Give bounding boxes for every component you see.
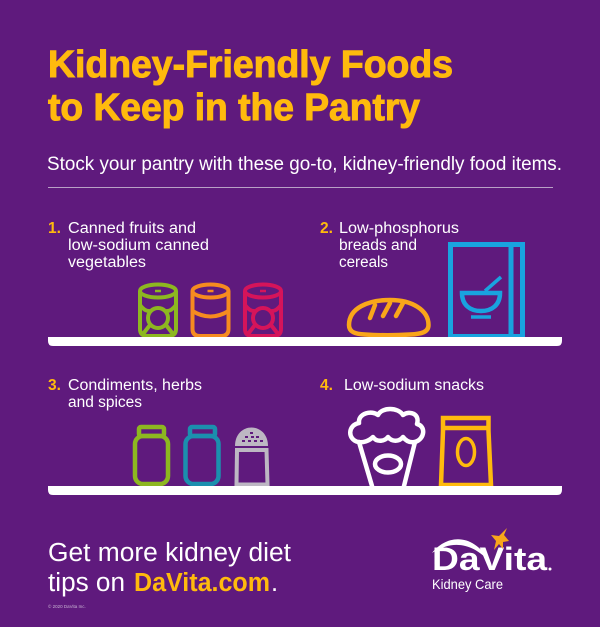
call to action xyxy=(48,539,291,597)
icon: salt shaker xyxy=(235,428,268,484)
item 3 label: 3. xyxy=(48,377,61,394)
shelf 2 xyxy=(48,486,562,495)
title: to Keep in the Pantry xyxy=(48,87,420,129)
title xyxy=(48,44,453,129)
call to action: tips on xyxy=(48,569,125,597)
title: Kidney-Friendly Foods xyxy=(48,44,453,86)
item 4 label: 4. xyxy=(320,377,333,394)
call to action: DaVita.com xyxy=(134,569,270,597)
item 1 label xyxy=(48,220,209,271)
icon: popcorn xyxy=(350,409,423,486)
item 1 label: low-sodium canned xyxy=(68,237,209,254)
icon: green can xyxy=(140,284,176,336)
item 3 label: and spices xyxy=(68,394,142,411)
item 1 label: Canned fruits and xyxy=(68,220,196,237)
item 2 label: breads and xyxy=(339,237,417,254)
item 2 label: Low-phosphorus xyxy=(339,220,459,237)
icon: cereal box xyxy=(450,243,522,337)
item 3 label: Condiments, herbs xyxy=(68,377,202,394)
call to action: Get more kidney diet xyxy=(48,539,291,567)
copyright: © 2020 DaVita Inc. xyxy=(48,603,86,609)
item 1 label: vegetables xyxy=(68,254,146,271)
icon: snack bag xyxy=(441,418,491,485)
item 4 label: Low-sodium snacks xyxy=(344,377,484,394)
item 2 label: 2. xyxy=(320,220,333,237)
logo: DaVita Kidney Care xyxy=(432,528,552,592)
item 2 label xyxy=(320,220,459,271)
shelf 1 xyxy=(48,337,562,346)
item 2 label: cereals xyxy=(339,254,388,271)
item 3 label xyxy=(48,377,202,411)
icon: pink can xyxy=(245,284,281,336)
item 1 label: 1. xyxy=(48,220,61,237)
icon: bread loaf xyxy=(349,300,428,335)
icon: teal jar xyxy=(186,427,218,484)
logo: DaVita Kidney Care: Kidney Care xyxy=(432,576,503,592)
subtitle: Stock your pantry with these go-to, kidney-friendly food items. xyxy=(47,154,562,175)
call to action: . xyxy=(271,569,278,597)
icon: orange can xyxy=(192,284,228,336)
logo: DaVita Kidney Care: DaVita xyxy=(432,541,547,577)
icon: green jar xyxy=(135,427,168,484)
